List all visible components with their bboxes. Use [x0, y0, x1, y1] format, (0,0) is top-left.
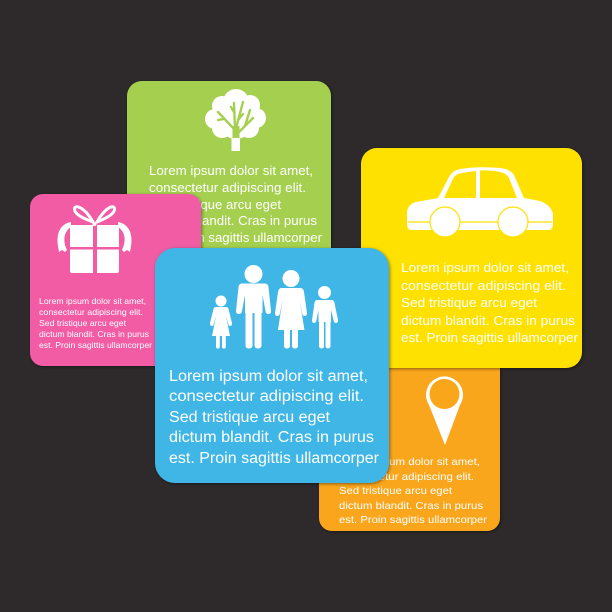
icon: family [210, 265, 338, 348]
text block: green card [149, 164, 322, 245]
text block: blue card: est. Proin sagittis ullamcorper [169, 450, 379, 467]
text block: blue card: consectetur adipiscing elit. [169, 388, 364, 405]
panel: yellow car card [361, 148, 582, 368]
text block: yellow card [401, 260, 579, 345]
text block: yellow card: consectetur adipiscing elit. [401, 278, 566, 293]
text block: green card: dictum blandit. Cras in purus [149, 214, 317, 228]
text block: orange card: Lorem ipsum dolor sit amet, [339, 456, 480, 468]
text block: pink card: consectetur adipiscing elit. [39, 307, 143, 317]
text block: blue card: Sed tristique arcu eget [169, 409, 331, 426]
figure: father [236, 265, 271, 348]
figure: son [312, 286, 338, 348]
text block: pink card: Sed tristique arcu eget [39, 318, 127, 328]
figure: daughter [210, 296, 232, 348]
text block: green card: est. Proin sagittis ullamcorper [149, 231, 322, 245]
text block: green card: Lorem ipsum dolor sit amet, [149, 164, 313, 178]
text block: pink card [39, 296, 152, 350]
text block: orange card: est. Proin sagittis ullamcorper [339, 514, 488, 526]
text block: yellow card: Sed tristique arcu eget [401, 295, 537, 310]
text block: green card: Sed tristique arcu eget [149, 198, 282, 212]
text block: blue card: Lorem ipsum dolor sit amet, [169, 368, 368, 385]
text block: orange card: dictum blandit. Cras in purus [339, 500, 483, 512]
icon: gift box [58, 207, 131, 273]
text block: orange card [339, 456, 488, 526]
text block: orange card: consectetur adipiscing elit. [339, 471, 474, 483]
icon: car [407, 167, 553, 237]
text block: orange card: Sed tristique arcu eget [339, 485, 452, 497]
icon: tree [205, 89, 266, 151]
text block: pink card: est. Proin sagittis ullamcorper [39, 340, 152, 350]
panel: pink gift card [30, 194, 201, 366]
text block: yellow card: dictum blandit. Cras in purus [401, 313, 576, 328]
text block: green card: consectetur adipiscing elit. [149, 181, 306, 195]
panel: green tree card [127, 81, 331, 266]
figure: mother [275, 270, 307, 348]
text block: pink card: Lorem ipsum dolor sit amet, [39, 296, 146, 306]
icon: map pin [426, 376, 463, 445]
text block: blue card [169, 368, 379, 467]
text block: blue card: dictum blandit. Cras in purus [169, 429, 374, 446]
text block: yellow card: Lorem ipsum dolor sit amet, [401, 260, 569, 275]
panel: blue family card [155, 248, 389, 483]
panel: orange location card [319, 340, 500, 531]
text block: pink card: dictum blandit. Cras in purus [39, 329, 149, 339]
text block: yellow card: est. Proin sagittis ullamcorper [401, 330, 579, 345]
